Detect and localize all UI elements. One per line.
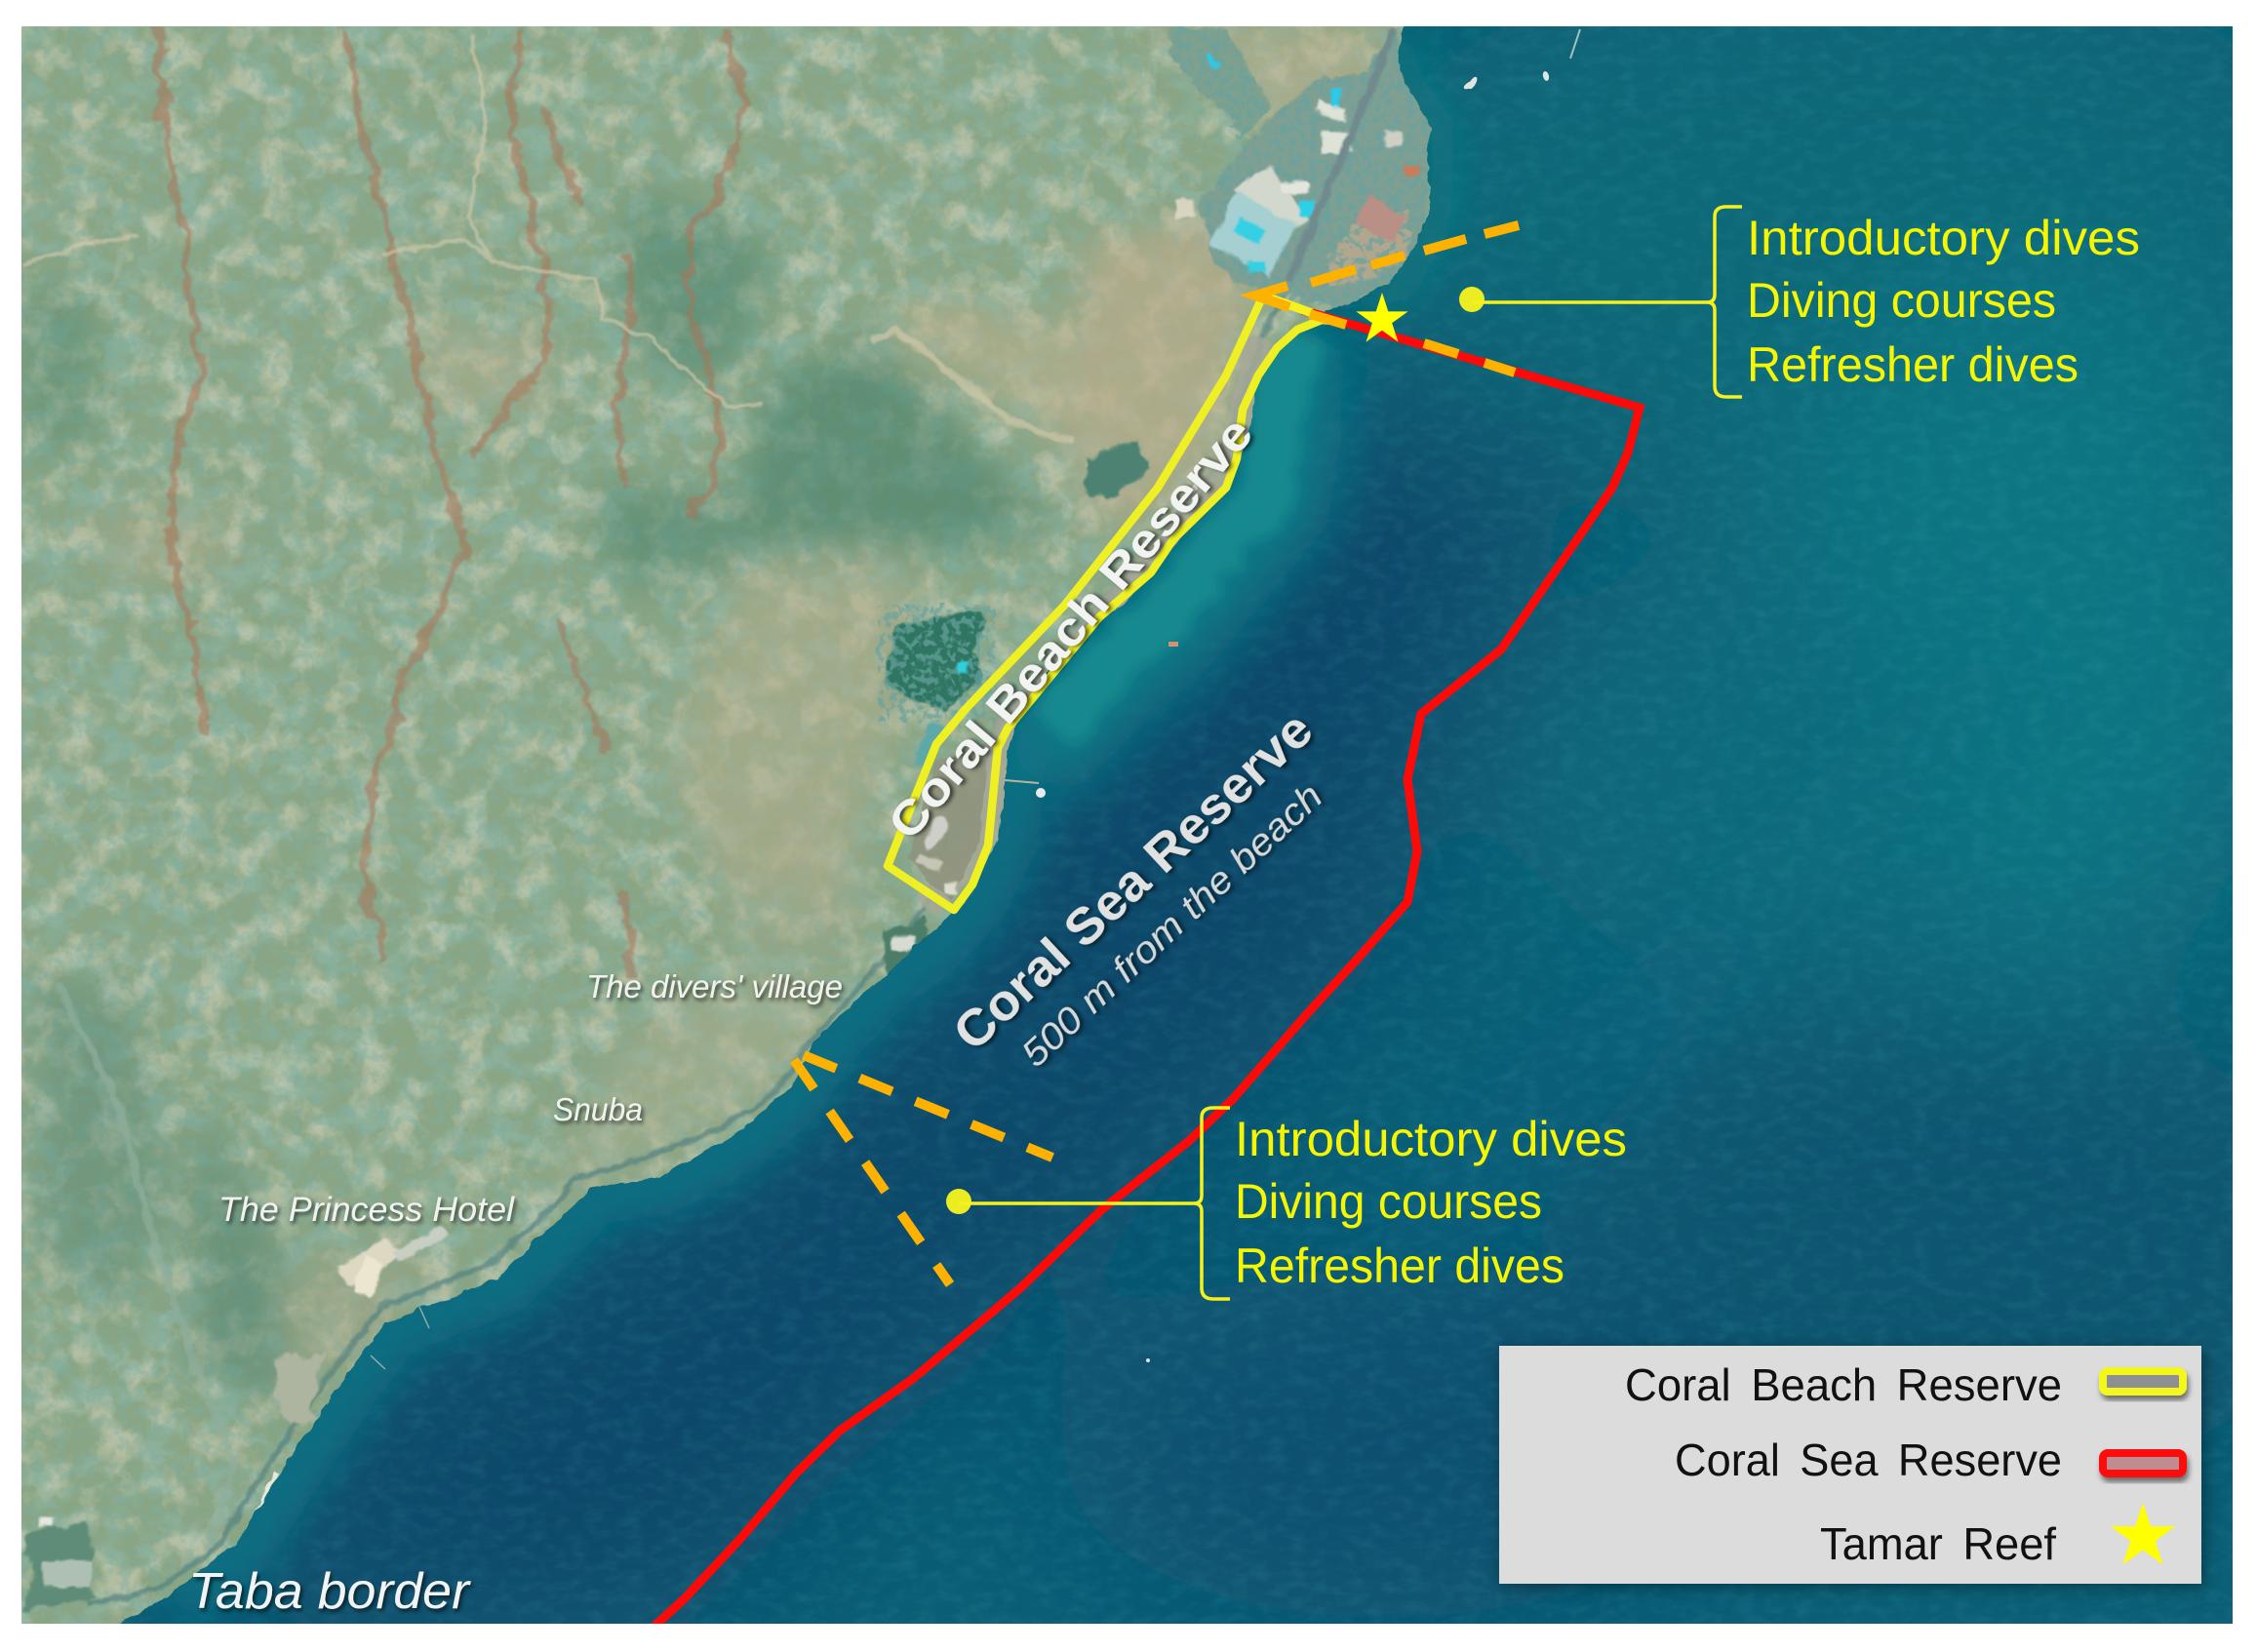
orange dashed dive zone, north: [1255, 225, 1519, 373]
terrain tone zones: [21, 26, 1385, 1404]
callout south: dive activities: [946, 1108, 1627, 1299]
callout south: dive activities: Diving courses: [1235, 1174, 1542, 1229]
resort areas: [29, 20, 1444, 1614]
shallow reef band: [176, 39, 1444, 1601]
callout north: dive activities: Introductory dives: [1747, 211, 2140, 265]
wadis: [161, 31, 742, 975]
callout south: dive activities: Introductory dives: [1235, 1112, 1627, 1166]
label: Snuba: Snuba: [553, 1091, 643, 1127]
icon: Tamar Reef star: [1356, 293, 1408, 342]
callout north: dive activities: Diving courses: [1747, 273, 2056, 328]
label: The Princess Hotel: The Princess Hotel: [218, 1191, 515, 1229]
callout south: dive activities: Refresher dives: [1235, 1239, 1564, 1293]
label: 500 m from the beach: 500 m from the beach: [1013, 776, 1330, 1076]
callout north: dive activities: [1459, 207, 2140, 397]
reserve interior beach strip: [927, 336, 1258, 907]
legend: Tamar Reef: [1820, 1518, 2056, 1569]
boundary segment yellow: [1263, 295, 1312, 313]
legend icon: star: [2111, 1503, 2175, 1564]
label: Coral Sea Reserve: Coral Sea Reserve: [943, 701, 1324, 1062]
legend: Coral Beach Reserve: [1625, 1359, 2062, 1410]
legend swatch: Coral Sea Reserve: [2103, 1453, 2183, 1474]
desert tracks: [24, 37, 1073, 1551]
legend swatch: Coral Beach Reserve: [2103, 1371, 2183, 1392]
label: Coral Beach Reserve: Coral Beach Reserve: [879, 408, 1263, 849]
legend: Coral Sea Reserve: [1675, 1435, 2062, 1485]
label: Taba border: Taba border: [188, 1563, 472, 1620]
coastal road: [88, 29, 1395, 1604]
orange dashed dive zone, south: [794, 1055, 1052, 1284]
Coral Sea Reserve line: [650, 310, 1640, 1631]
legend: [1499, 1346, 2201, 1584]
callout north: dive activities: Refresher dives: [1747, 337, 2079, 392]
Coral Beach Reserve outline: [888, 295, 1344, 910]
label: The divers' village: The divers' village: [586, 968, 843, 1004]
white shoreline strips: [215, 488, 1195, 1570]
land: [0, 0, 1463, 1652]
boats and piers: [371, 29, 1580, 1369]
